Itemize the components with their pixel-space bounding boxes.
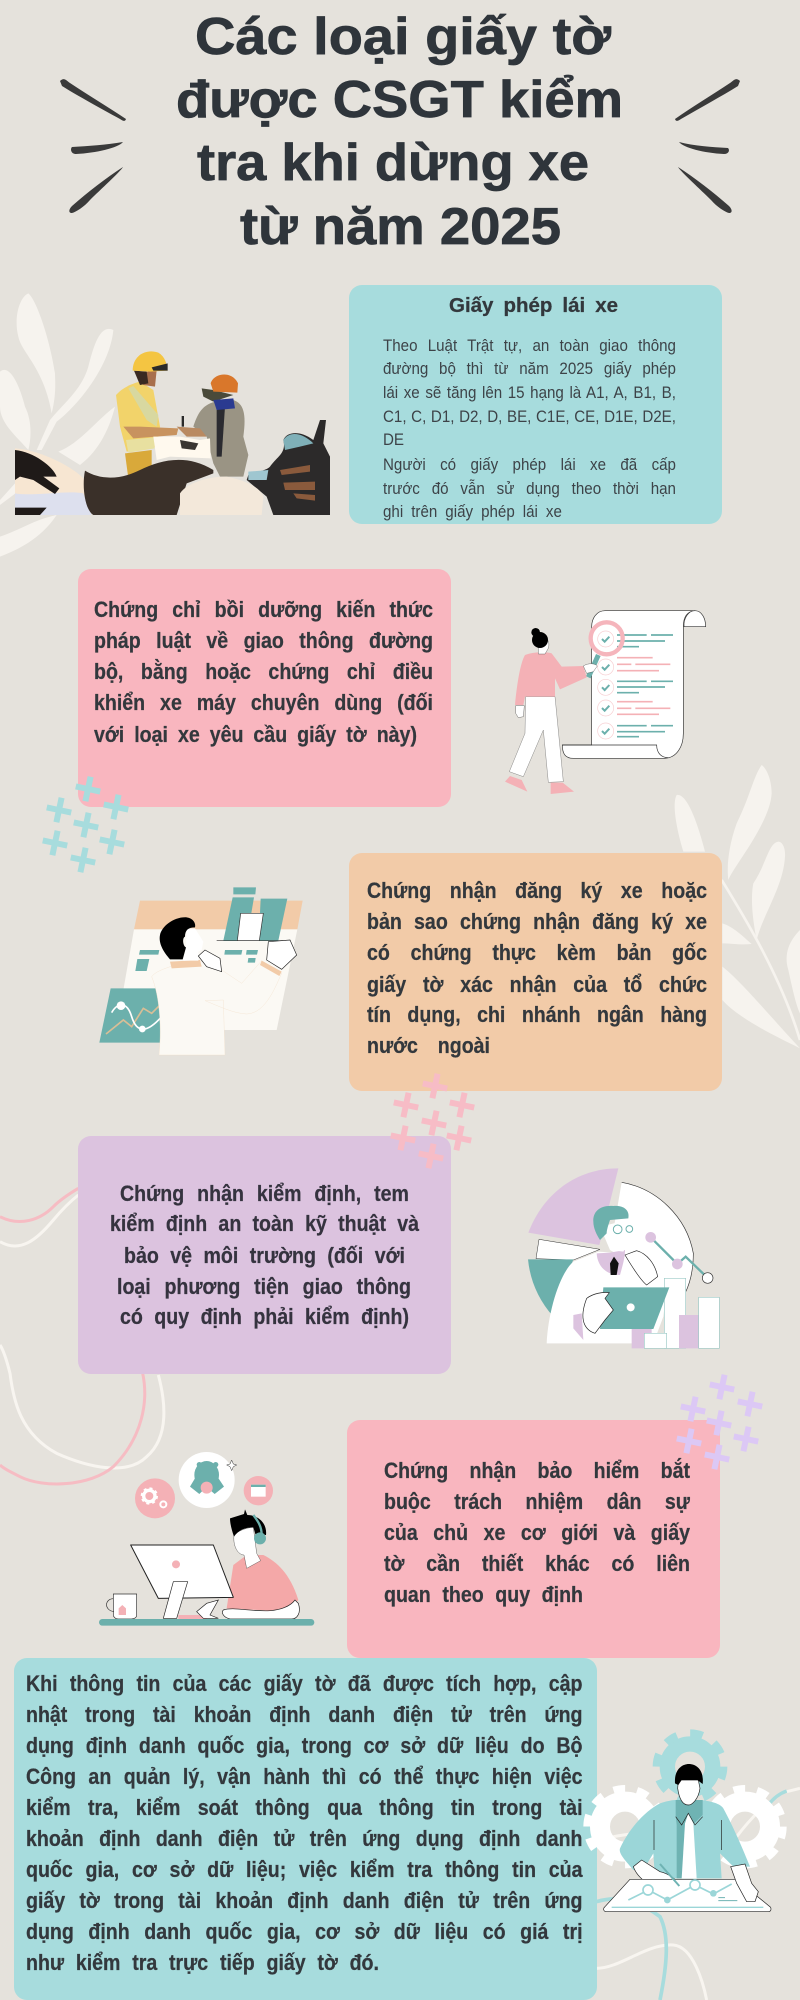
illustration: man studying charts on a board [99,887,303,1055]
panel: electronic identification note: Công an quản lý, vận hành thì có thể thực hiện việc [26,1764,582,1789]
title: Các loại giấy tờ [195,8,611,66]
title: được CSGT kiểm [176,71,623,129]
panel: legal training certificate: Chứng chỉ bồi dưỡng kiến thức [94,597,433,622]
text block: licence details: trước đó vẫn sử dụng theo thời hạn [383,479,676,498]
title [176,8,623,256]
photo: traffic police checking papers beside motorbikes [15,351,330,515]
text block: licence details: C1, C, D1, D2, D, BE, C1E, CE, D1E, D2E, [383,407,676,426]
heading: driving licence: Giấy phép lái xe [449,294,618,317]
decoration: purple plus marks [676,1374,763,1470]
illustration: man with gears drawing a chart [583,1729,787,1912]
panel: technical inspection certificate: Chứng nhận kiểm định, tem [120,1181,409,1206]
panel: legal training certificate: bộ, bằng hoặc chứng chỉ điều [94,659,433,684]
text block: licence details: Theo Luật Trật tự, an toàn giao thông [383,336,676,355]
panel: electronic identification note: khoản định danh điện tử trên ứng dụng định danh [26,1826,582,1851]
panel: legal training certificate: khiển xe máy chuyên dùng (đối [94,690,433,715]
panel: technical inspection certificate: kiểm định an toàn kỹ thuật và [110,1211,419,1236]
panel: electronic identification note: như kiểm tra trực tiếp giấy tờ đó. [26,1950,378,1975]
text block: licence details: ghi trên giấy phép lái xe [383,502,562,521]
panel: vehicle registration: Chứng nhận đăng ký xe hoặc [367,878,707,903]
panel: electronic identification note: kiểm tra, kiểm soát thông qua thông tin trong tài [26,1795,582,1820]
panel: vehicle registration [349,853,722,1091]
panel: electronic identification note: dụng định danh quốc gia, cơ sở dữ liệu có giá trị [26,1919,582,1944]
panel: technical inspection certificate [78,1136,451,1374]
title: tra khi dừng xe [197,134,589,192]
panel: electronic identification note [14,1658,597,2000]
decoration: teal plus marks [42,776,129,873]
panel: vehicle registration: nước ngoài [367,1033,490,1058]
panel: electronic identification note: dụng định danh quốc gia, trong cơ sở dữ liệu do Bộ [26,1733,582,1758]
title: từ năm 2025 [240,198,561,256]
illustration: man with headphones at a computer [99,1452,314,1626]
panel: technical inspection certificate: có quy định phải kiểm định) [120,1304,409,1329]
illustration: man with tablet, pie chart and bars [528,1168,720,1349]
panel: compulsory insurance: của chủ xe cơ giới và giấy [384,1520,690,1545]
panel: vehicle registration: có chứng thực kèm bản gốc [367,940,707,965]
text block: licence details [383,336,676,521]
panel: vehicle registration: bản sao chứng nhận đăng ký xe [367,909,707,934]
text block: licence details: lái xe sẽ tăng lên 15 hạng là A1, A, B1, B, [383,383,676,402]
illustration: woman inspecting a checklist scroll with a magnifier [505,610,706,794]
panel: legal training certificate [78,569,451,807]
panel: compulsory insurance: quan theo quy định [384,1582,583,1607]
text block: licence details: Người có giấy phép lái xe đã cấp [383,455,676,474]
panel: technical inspection certificate: bảo vệ môi trường (đối với [124,1243,405,1268]
panel: compulsory insurance [347,1420,720,1658]
panel: electronic identification note: Khi thông tin của các giấy tờ đã được tích hợp, cập [26,1671,582,1696]
text block: licence details: DE [383,430,404,449]
panel: compulsory insurance: buộc trách nhiệm dân sự [384,1489,690,1514]
panel: legal training certificate: với loại xe yêu cầu giấy tờ này) [94,722,417,747]
panel: legal training certificate: pháp luật về giao thông đường [94,628,433,653]
panel: compulsory insurance: Chứng nhận bảo hiểm bắt [384,1458,690,1483]
decoration: pink plus marks [390,1073,475,1169]
panel: compulsory insurance: tờ cần thiết khác có liên [384,1551,690,1576]
panel: vehicle registration: tín dụng, chi nhánh ngân hàng [367,1002,707,1027]
title decoration: brush strokes left and right [60,79,740,213]
panel: technical inspection certificate: loại phương tiện giao thông [117,1274,411,1299]
text block: licence details: đường bộ thì từ năm 2025 giấy phép [383,359,676,378]
panel: electronic identification note: quốc gia, cơ sở dữ liệu; việc kiểm tra thông tin của [26,1857,582,1882]
panel: vehicle registration: giấy tờ xác nhận của tổ chức [367,972,707,997]
panel: electronic identification note: giấy tờ trong tài khoản định danh điện tử trên ứng [26,1888,582,1913]
panel: driving licence [349,285,722,524]
panel: electronic identification note: nhật trong tài khoản định danh điện tử trên ứng [26,1702,582,1727]
